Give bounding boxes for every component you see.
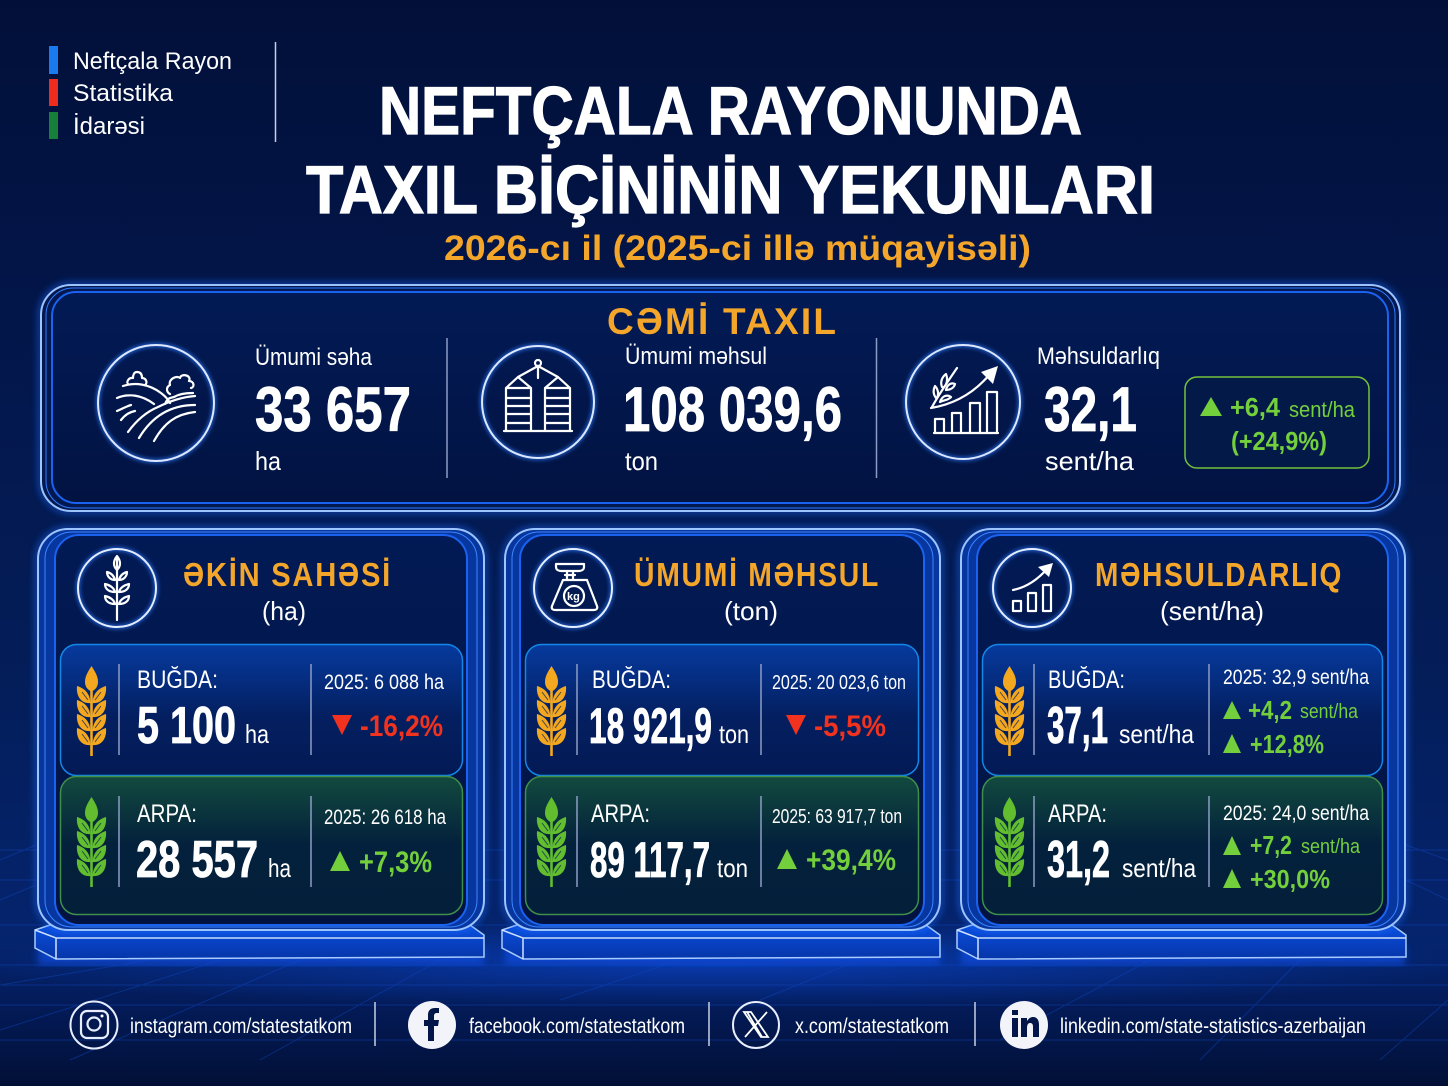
stat: total product: Ümumi məhsul <box>625 343 767 370</box>
footer social links: facebook.com/statestatkom <box>469 1015 685 1038</box>
row: barley product: 2025: 63 917,7 ton <box>772 806 902 828</box>
row: wheat yield: BUĞDA: <box>1048 665 1125 694</box>
footer social links: instagram.com/statestatkom <box>130 1015 352 1038</box>
row: barley product: +39,4% <box>806 844 896 877</box>
panel: yield <box>957 529 1406 965</box>
panel: sown area <box>35 529 484 965</box>
stat: total area: ha <box>255 446 281 476</box>
row: wheat product: BUĞDA: <box>592 665 671 694</box>
row: barley area: 28 557 <box>136 831 258 889</box>
icon: gold wheat <box>537 666 566 756</box>
sown area heading: ƏKİN SAHƏSİ <box>183 556 392 593</box>
panel: total product <box>502 529 940 965</box>
row: barley yield: +7,2 <box>1250 830 1292 860</box>
row: wheat area: -16,2% <box>360 710 443 743</box>
icon: fields <box>98 345 214 461</box>
row: barley yield: sent/ha <box>1122 853 1196 883</box>
icon: bars with arrow <box>993 549 1071 627</box>
organisation logo legend: Statistika <box>73 80 174 107</box>
icon: green wheat <box>77 797 106 887</box>
stat: yield: Məhsuldarlıq <box>1037 343 1160 370</box>
row: barley yield: 2025: 24,0 sent/ha <box>1223 802 1369 825</box>
stat: total area: Ümumi səha <box>255 344 373 371</box>
row: barley product <box>526 776 918 914</box>
stat: total product <box>623 343 842 476</box>
icon: instagram <box>70 1002 118 1048</box>
row: barley yield: ARPA: <box>1048 800 1107 828</box>
row: wheat product: 2025: 20 023,6 ton <box>772 672 906 694</box>
sown area unit: (ha) <box>262 596 306 626</box>
row: barley area: +7,3% <box>359 846 432 879</box>
row: wheat yield: 2025: 32,9 sent/ha <box>1223 666 1369 689</box>
row: wheat product <box>526 644 918 776</box>
organisation logo legend: Neftçala Rayon <box>73 48 232 75</box>
row: wheat yield: sent/ha <box>1119 719 1194 749</box>
total panel heading: CƏMİ TAXIL <box>607 301 836 342</box>
row: wheat yield: +12,8% <box>1250 729 1324 759</box>
icon: green wheat <box>537 797 566 887</box>
row: wheat product: 18 921,9 <box>589 698 712 754</box>
subtitle: 2026-cı il (2025-ci illə müqayisəli) <box>444 229 1031 268</box>
product unit: (ton) <box>724 596 778 626</box>
icon: scale: kg <box>567 591 580 603</box>
row: barley yield <box>982 776 1382 914</box>
row: wheat product: -5,5% <box>814 710 886 743</box>
row: barley yield: sent/ha <box>1301 836 1361 858</box>
row: barley yield: 31,2 <box>1047 831 1110 889</box>
stat: total product: 108 039,6 <box>623 375 842 445</box>
stat: total area: 33 657 <box>255 375 411 445</box>
panel: total grain <box>41 285 1400 511</box>
row: barley yield: +30,0% <box>1250 864 1330 894</box>
callout: yield change: sent/ha <box>1289 397 1356 422</box>
row: wheat product: ton <box>719 719 749 749</box>
row: wheat yield: 37,1 <box>1047 697 1108 755</box>
row: wheat yield: sent/ha <box>1300 701 1359 723</box>
stat: yield <box>1037 343 1160 476</box>
stat: total area <box>255 344 411 476</box>
footer social links: x.com/statestatkom <box>795 1015 949 1038</box>
row: wheat yield: +4,2 <box>1248 695 1292 725</box>
product heading: ÜMUMİ MƏHSUL <box>634 556 880 593</box>
callout: yield change <box>1185 377 1369 468</box>
icon: scale <box>534 549 612 627</box>
icon: facebook <box>408 1001 456 1049</box>
row: wheat area: 2025: 6 088 ha <box>324 671 444 694</box>
row: wheat area: BUĞDA: <box>137 665 218 694</box>
yield heading: MƏHSULDARLIQ <box>1095 556 1343 593</box>
row: barley area: ha <box>268 853 291 883</box>
title <box>306 73 1155 228</box>
icon: wheat outline <box>78 549 156 627</box>
stat: yield: 32,1 <box>1044 375 1137 445</box>
icon: gold wheat <box>995 666 1024 756</box>
icon: silos <box>482 346 594 458</box>
title: TAXIL BİÇİNİNİN YEKUNLARI <box>306 152 1155 228</box>
row: barley area <box>60 776 462 914</box>
footer social links: linkedin.com/state-statistics-azerbaijan <box>1060 1015 1366 1038</box>
stat: total product: ton <box>625 446 658 476</box>
footer social links <box>70 1001 1366 1049</box>
organisation logo legend <box>49 42 276 142</box>
icon: linkedin <box>1000 1001 1048 1049</box>
icon: green wheat <box>995 797 1024 887</box>
organisation logo legend: İdarəsi <box>73 113 145 140</box>
callout: yield change: +6,4 <box>1230 392 1281 422</box>
callout: yield change: (+24,9%) <box>1231 426 1327 456</box>
row: wheat area: 5 100 <box>137 697 236 755</box>
icon: x <box>733 1002 779 1048</box>
yield unit: (sent/ha) <box>1160 596 1264 626</box>
row: wheat yield <box>982 644 1382 776</box>
row: barley product: ARPA: <box>591 800 650 828</box>
icon: growth chart <box>906 345 1020 459</box>
row: wheat area: ha <box>245 719 269 749</box>
row: barley area: 2025: 26 618 ha <box>324 806 446 829</box>
row: barley product: 89 117,7 <box>590 832 710 888</box>
row: barley product: ton <box>717 853 748 883</box>
title: NEFTÇALA RAYONUNDA <box>379 73 1082 149</box>
icon: gold wheat <box>77 666 106 756</box>
stat: yield: sent/ha <box>1045 446 1135 476</box>
row: wheat area <box>60 644 462 776</box>
row: barley area: ARPA: <box>137 800 197 828</box>
